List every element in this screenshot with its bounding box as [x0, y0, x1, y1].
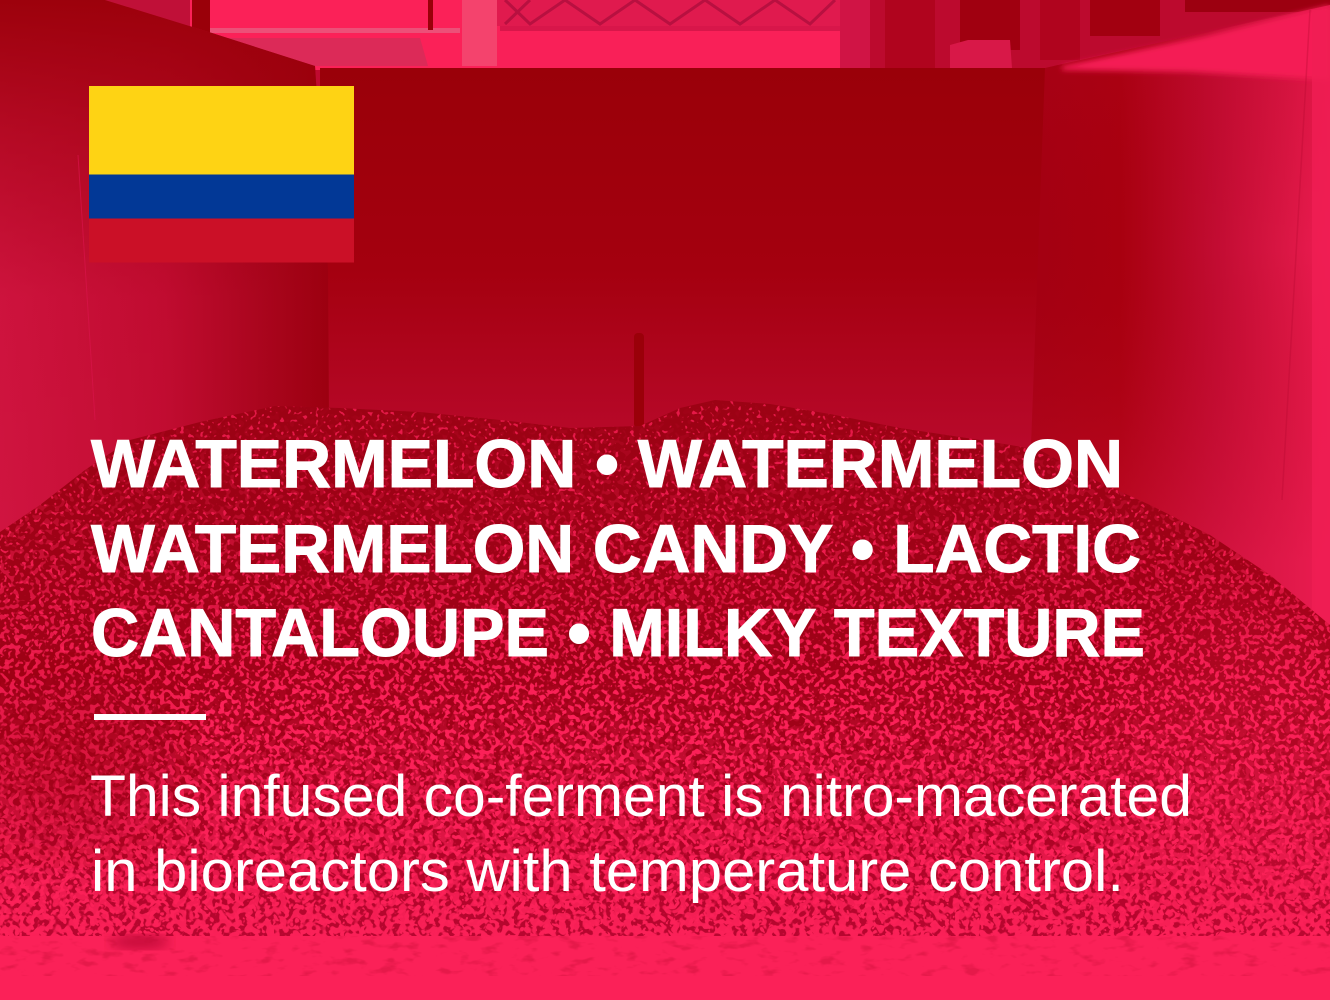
description text [90, 764, 1192, 904]
divider rule [94, 714, 206, 720]
icon: Colombian flag [89, 86, 354, 262]
background: floor [0, 935, 1330, 1000]
heading: flavour notes: WATERMELON • WATERMELON [91, 426, 1123, 502]
background: back wall [320, 68, 1050, 468]
heading: flavour notes [91, 426, 1145, 671]
background: left wall [0, 0, 329, 540]
description text: in bioreactors with temperature control. [91, 839, 1124, 904]
background: overhead structure [0, 0, 1330, 70]
background: dark post [634, 333, 644, 428]
heading: flavour notes: WATERMELON CANDY • LACTIC [91, 511, 1141, 587]
background: right wall [1030, 5, 1330, 700]
heading: flavour notes: CANTALOUPE • MILKY TEXTURE [91, 595, 1145, 671]
description text: This infused co-ferment is nitro-macerated [90, 764, 1192, 829]
background: cherry pile [0, 395, 1330, 940]
